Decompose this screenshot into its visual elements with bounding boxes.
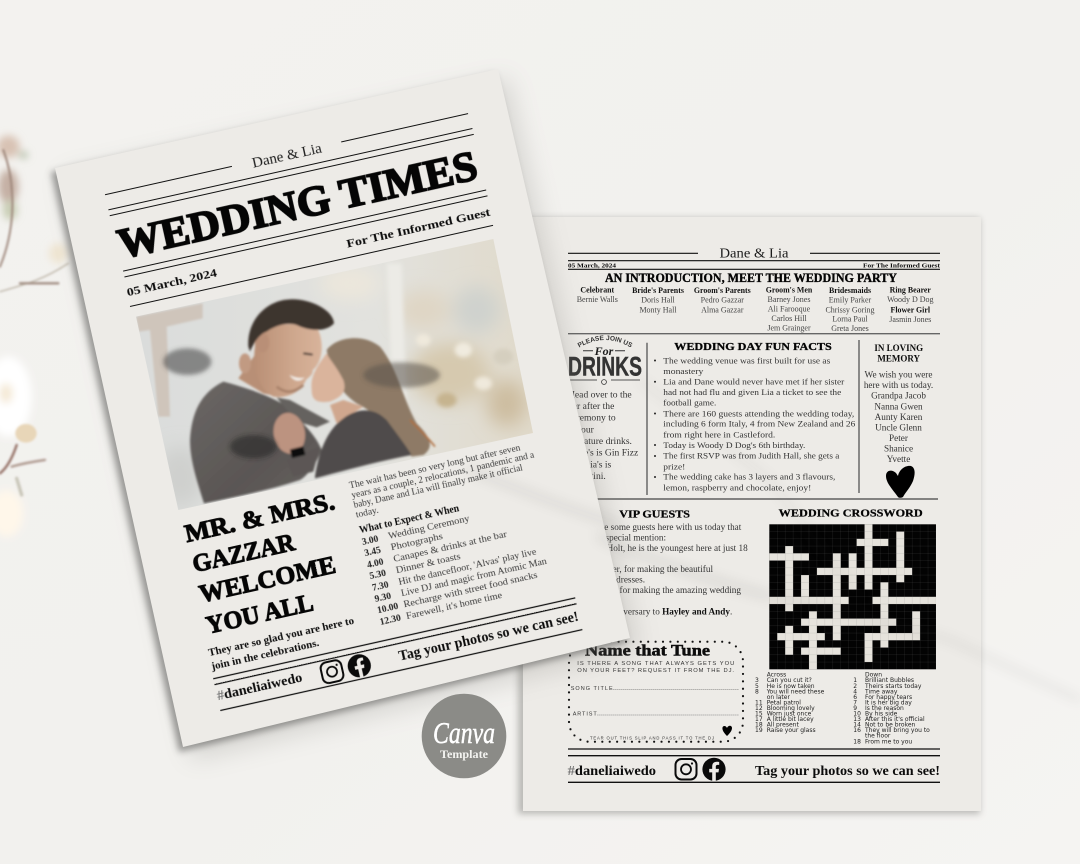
wedding party names: Doris Hall [641, 296, 676, 304]
fun facts list: had not had flu and given Lia a ticket to see the [663, 388, 842, 397]
crossword clues: across: 17 [755, 716, 763, 723]
song request slip: TEAR OUT THIS SLIP AND PASS IT TO THE DJ [590, 735, 714, 740]
photo of couple [130, 233, 540, 517]
crossword clues: down: 9 [853, 705, 857, 712]
crossword clues: down: 4 [853, 688, 857, 695]
schedule: Recharge with street food snacks [403, 570, 539, 611]
back paper [523, 217, 981, 811]
song request slip: ON YOUR FEET? REQUEST IT FROM THE DJ. [577, 668, 734, 674]
VIP guests text: months! [573, 554, 603, 564]
fun facts list: There are 160 guests attending the wedding today, [663, 409, 854, 418]
drinks sign: PLEASE JOIN US [577, 335, 632, 348]
front paper shadow [51, 74, 627, 752]
crossword grid [769, 524, 936, 669]
wedding party names: Ring Bearer [890, 286, 931, 295]
wedding party names: Woody D Dog [887, 295, 934, 304]
schedule: 10.00 [376, 602, 400, 616]
crossword clues: across: 3 [755, 677, 759, 684]
wedding party names: Jem Grainger [767, 323, 811, 332]
drinks sign [568, 335, 642, 385]
wedding party names: Groom's Men [766, 286, 813, 295]
in loving memory: Peter [889, 433, 908, 443]
in loving memory: IN LOVING [874, 343, 923, 353]
icon: facebook [702, 758, 726, 781]
fun facts list [654, 356, 855, 492]
wedding party names: Bride's Parents [632, 286, 684, 295]
back footer: Tag your photos so we can see! [755, 763, 940, 778]
crossword clues: across: 11 [755, 699, 763, 706]
wedding party names: Chrissy Goring [825, 305, 875, 314]
front footer: #daneliaiwedo [216, 671, 304, 704]
front page [55, 69, 630, 747]
schedule: Hit the dancefloor, 'Alvas' play live [397, 546, 537, 588]
man's hand and watch [272, 411, 307, 456]
crossword clues: across: Worn just once [767, 710, 812, 718]
schedule: Photographs [390, 531, 444, 553]
crossword clues: down: Theirs starts today [864, 683, 922, 690]
crossword clues: down: 10 [853, 710, 861, 718]
schedule: 5.30 [369, 569, 387, 582]
crossword clues: down: Brilliant Bubbles [865, 677, 914, 684]
crossword clues: across: 19 [755, 727, 763, 734]
song request slip: SONG TITLE [571, 686, 613, 692]
crossword clues: down: They will bring you to [864, 727, 930, 734]
back masthead: Dane & Lia [720, 247, 789, 262]
title: WEDDING TIMES [114, 144, 482, 268]
crossword clues: down: 1 [853, 677, 857, 684]
icon: heart [886, 466, 915, 498]
wedding party names: Bridesmaids [829, 286, 871, 295]
names: Dane & Lia [251, 140, 324, 172]
welcome subtext: They are so glad you are here to [207, 616, 355, 659]
wedding party names: Bernie Walls [577, 295, 618, 304]
wide soft shadow of front page [62, 78, 640, 760]
soft leaf-stem shadows across the pages [470, 380, 1080, 700]
schedule: Wedding Ceremony [387, 513, 471, 542]
in loving memory: here with us today. [864, 380, 933, 390]
in loving memory: MEMORY [877, 354, 921, 364]
drinks text: Dane's is Gin Fizz [568, 448, 638, 459]
in loving memory: Shanice [884, 444, 913, 454]
schedule: 12.30 [379, 613, 402, 628]
crossword clues: down: 13 [853, 716, 861, 723]
wedding party names: Carlos Hill [771, 314, 807, 323]
drinks text: a Martini. [568, 471, 606, 482]
drinks sign: DRINKS [568, 352, 642, 382]
in loving memory [864, 343, 933, 464]
schedule: Live DJ and magic from Atomic Man [400, 556, 548, 599]
wedding party names: Celebrant [580, 286, 615, 295]
song request slip [569, 642, 743, 742]
fun facts list: football game. [663, 399, 716, 408]
crossword clues: across: 18 [755, 722, 763, 729]
in loving memory: Nanna Gwen [874, 401, 923, 411]
drinks text: ceremony to [568, 413, 616, 424]
crossword clues: down: For happy tears [865, 694, 912, 701]
crossword clues: across: Blooming lovely [767, 705, 815, 712]
VIP guests text: Uncle Tom, for making the amazing wedding [574, 585, 741, 595]
tagline: For The Informed Guest [345, 205, 492, 251]
drinks text: Enjoy! [568, 482, 594, 493]
VIP guests text: Harry Holt, he is the youngest here at just 18 [583, 543, 748, 553]
in loving memory: Grandpa Jacob [871, 391, 926, 401]
fun facts list: Lia and Dane would never have met if her sister [663, 378, 845, 387]
drinks text: try our [568, 425, 595, 436]
crossword clues: across: Across [767, 672, 786, 679]
back paper shadow [518, 218, 980, 814]
back footer: #daneliaiwedo [568, 763, 656, 778]
back masthead: For The Informed Guest [863, 263, 941, 270]
wedding party names: Greta Jones [831, 324, 869, 333]
drinks text: signature drinks. [568, 436, 632, 447]
wedding party names [577, 286, 934, 333]
crossword clues: down: 2 [853, 683, 857, 690]
woman's hair [327, 338, 430, 457]
song request slip: ARTIST [573, 711, 597, 717]
front footer: Tag your photos so we can see! [397, 609, 580, 665]
crossword clues: down: 6 [853, 694, 857, 701]
drinks sign: For [594, 344, 614, 358]
crossword clues: down: Time away [864, 688, 898, 695]
fun facts list: The first RSVP was from Judith Hall, she gets a [663, 452, 840, 461]
drinks text: Head over to the [568, 389, 632, 400]
crossword clues: across: Raise your glass [767, 727, 816, 734]
wedding party names: Barney Jones [768, 295, 810, 304]
wedding party names: Ali Farooque [768, 305, 811, 314]
VIP guests text: Aunty Mavis Carver, for making the beautiful [544, 564, 713, 574]
crossword clues: across: You will need these [766, 688, 825, 695]
crossword clues: down: By his side [865, 710, 898, 718]
man's face [254, 324, 322, 397]
front footer [213, 598, 582, 710]
front masthead rules [105, 113, 494, 306]
schedule heading: What to Expect & When [358, 503, 460, 536]
fun facts list: The wedding cake has 3 layers and 3 flavours, [663, 473, 835, 482]
crossword clues: down: 16 [853, 727, 861, 734]
crossword clues: down: Down [865, 672, 882, 679]
heading: VIP guests: VIP GUESTS [619, 510, 690, 521]
crossword clues: down: After this it's official [865, 716, 925, 723]
VIP guests text: deserve a special mention: [569, 532, 666, 542]
welcome subtext: join in the celebrations. [209, 638, 321, 673]
crossword clues: across [755, 672, 825, 734]
back masthead: 05 March, 2024 [568, 263, 617, 270]
crossword clues: down: the floor [865, 733, 891, 740]
crossword clues: down: Not to be broken [865, 722, 916, 729]
in loving memory: Uncle Glenn [875, 423, 922, 433]
woman's sweater [315, 410, 412, 478]
welcome headline [182, 488, 358, 640]
crossword clues: down: It is her big day [865, 699, 912, 706]
canva badge: Template [440, 747, 489, 761]
crossword clues: down: Is the reason [865, 705, 904, 712]
VIP guests text [544, 522, 748, 616]
wedding party names: Pedro Gazzar [701, 296, 744, 304]
schedule: Farewell, it's home time [405, 590, 503, 622]
crossword clues: across: He is now taken [767, 683, 815, 690]
icon: instagram [676, 759, 696, 780]
couple figures [190, 299, 435, 503]
schedule: 9.30 [374, 592, 392, 605]
welcome headline: MR. & MRS. [182, 488, 337, 548]
crossword clues: down: From me to you [865, 738, 912, 745]
wedding party names: Alma Gazzar [701, 305, 744, 314]
crossword clues: across: 12 [755, 705, 763, 712]
fun facts list: monastery [663, 367, 704, 376]
back footer [568, 749, 940, 782]
crossword clues: across: on later [767, 694, 790, 701]
drinks text: bar after the [568, 401, 614, 412]
date: 05 March, 2024 [125, 265, 218, 299]
icon: instagram [319, 659, 345, 684]
schedule: 7.30 [371, 580, 390, 594]
crossword clues: across: A little bit lacey [767, 716, 814, 723]
man's sweater [190, 382, 322, 503]
crossword clues: across: Petal patrol [767, 699, 801, 706]
decorative flowers at left edge [0, 135, 68, 537]
wedding party names: Flower Girl [891, 305, 931, 314]
drinks text: and Lia's is [568, 459, 612, 470]
wedding party names: Monty Hall [639, 305, 677, 314]
in loving memory: We wish you were [865, 369, 932, 379]
wedding party names: Emily Parker [829, 296, 872, 304]
in loving memory: Yvette [887, 454, 910, 464]
crossword clues: across: 15 [755, 710, 763, 718]
crossword clues: across: 8 [755, 688, 759, 695]
fun facts list: lemon, raspberry and chocolate, enjoy! [663, 483, 811, 492]
leaf shadows on photo [163, 348, 440, 458]
intro paragraph [348, 440, 540, 521]
back page [514, 214, 984, 818]
heading: fun facts: WEDDING DAY FUN FACTS [674, 341, 832, 353]
welcome headline: YOU ALL [204, 590, 316, 640]
heading: wedding party: AN INTRODUCTION, MEET THE WEDDING PARTY [605, 271, 897, 285]
schedule: 3.00 [361, 534, 380, 548]
welcome subtext [206, 616, 358, 673]
VIP guests text: Happy anniversary to Hayley and Andy. [581, 606, 732, 616]
intro paragraph: years as a couple, 2 relocations, 1 pandemic and a [350, 449, 536, 501]
wedding party names: Jasmin Jones [889, 315, 931, 324]
wedding party names: Groom's Parents [694, 286, 751, 295]
icon: small heart [722, 726, 732, 736]
crossword clues: down: 18 [853, 738, 861, 745]
schedule: 4.00 [366, 557, 385, 571]
wedding party names: Lorna Paul [832, 315, 868, 324]
front paper [55, 69, 630, 747]
crossword clues: across: Can you cut it? [767, 677, 812, 684]
drinks text [568, 389, 638, 493]
crossword clues: across: All present [767, 722, 800, 729]
fun facts list: The wedding venue was first built for use as [663, 356, 830, 365]
intro paragraph: today. [355, 505, 380, 521]
VIP guests text: cake. [584, 596, 603, 606]
welcome headline: GAZZAR [190, 529, 298, 578]
fun facts list: from right here in Castleford. [663, 430, 775, 439]
song request slip: Name that Tune [585, 643, 710, 660]
back masthead [568, 247, 941, 270]
schedule: Dinner & toasts [395, 551, 462, 576]
icon: facebook [345, 652, 373, 680]
crossword clues: down: 7 [853, 699, 857, 706]
intro paragraph: The wait has been so very long but after seven [348, 442, 522, 491]
crossword clues: down: 14 [853, 722, 861, 729]
welcome headline: WELCOME [197, 552, 338, 608]
front text (rotated) [104, 108, 584, 711]
fun facts list: Today is Woody D Dog's 6th birthday. [663, 441, 805, 450]
VIP guests text: bridesmaids dresses. [569, 575, 645, 585]
VIP guests text: We have some guests here with us today that [577, 522, 742, 532]
heading: crossword: WEDDING CROSSWORD [779, 509, 923, 520]
schedule: 3.45 [364, 546, 382, 559]
crossword clues: across: 5 [755, 683, 759, 690]
canva badge [422, 694, 506, 778]
schedule: Canapes & drinks at the bar [392, 529, 509, 565]
schedule [361, 499, 553, 628]
intro paragraph: baby, Dane and Lia will finally make it official [353, 462, 524, 511]
in loving memory: Aunty Karen [875, 412, 923, 422]
canva badge: Canva [433, 715, 495, 750]
song request slip: IS THERE A SONG THAT ALWAYS GETS YOU [577, 661, 734, 667]
crossword clues: down [853, 672, 930, 745]
fun facts list: prize! [663, 462, 685, 471]
fun facts list: including 6 form Italy, 4 from New Zealand and 26 [663, 420, 855, 429]
